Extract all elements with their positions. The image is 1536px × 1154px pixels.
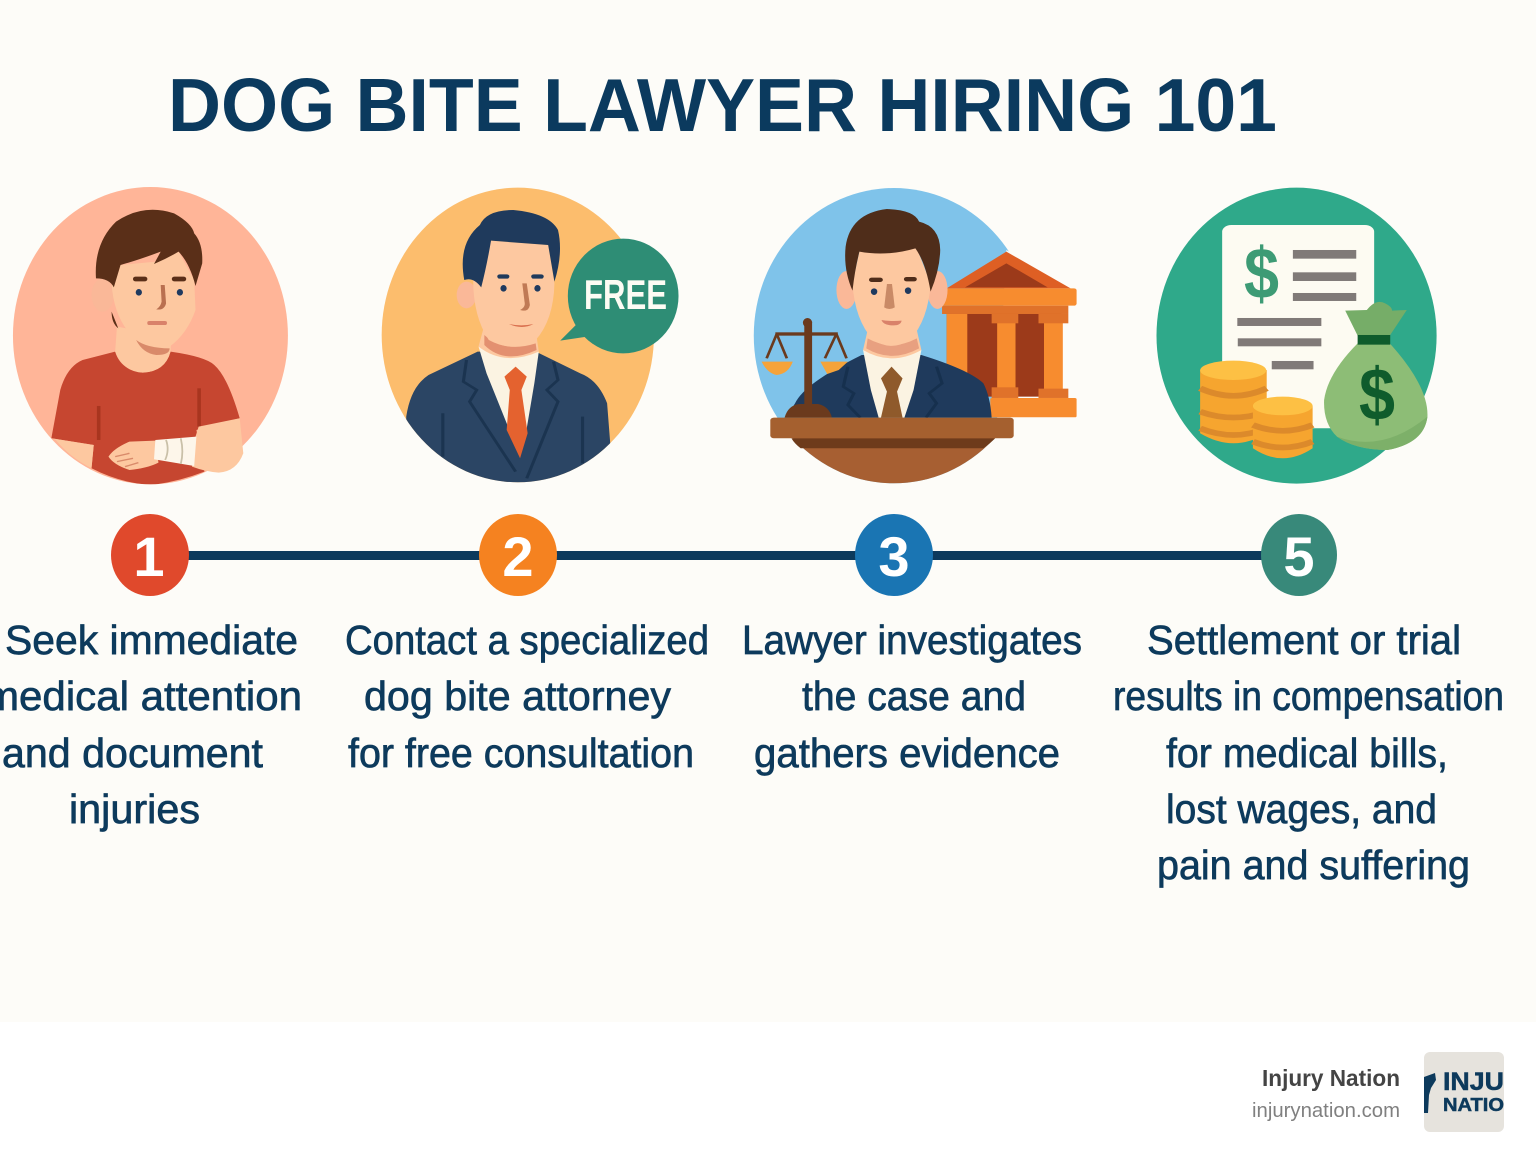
ear [457, 282, 476, 308]
settlement drawing [1156, 188, 1437, 484]
podium top [770, 418, 1014, 438]
illustration: attorney with free bubble [382, 188, 679, 487]
eyebrows [869, 277, 917, 282]
attorney drawing [382, 188, 679, 487]
red shirt [51, 352, 240, 485]
mouth [509, 324, 533, 327]
capitals and bases [992, 314, 1068, 398]
badge number: 5 [1283, 525, 1315, 588]
mouth [881, 320, 902, 325]
title: DOG BITE LAWYER HIRING 101 [168, 63, 1277, 147]
illustration: settlement money [1156, 188, 1437, 484]
eyes [871, 287, 911, 295]
neck [479, 330, 539, 358]
neck [863, 330, 921, 358]
logo wordmark: NATIO [1443, 1095, 1504, 1115]
nose [520, 283, 530, 311]
badge circle [479, 514, 557, 596]
neck shadow [136, 340, 170, 355]
scale strings [767, 334, 847, 358]
finial [803, 318, 812, 327]
badge number: 2 [502, 525, 534, 588]
bandage [154, 437, 196, 466]
hair [845, 209, 940, 292]
badge 2 [479, 514, 557, 596]
scale pans [762, 362, 848, 375]
logo wordmark: INJU [1443, 1068, 1504, 1096]
step 5 text: Settlement or trial [1147, 617, 1461, 663]
interior [947, 313, 1061, 397]
step 3 text: gathers evidence [754, 730, 1060, 776]
bag neck [1345, 302, 1407, 336]
face [473, 241, 554, 347]
badge 1 [111, 514, 189, 596]
badge 3 [855, 514, 933, 596]
lower brown fill [793, 438, 994, 484]
stack top [1253, 397, 1313, 415]
step 1 text: injuries [69, 786, 200, 832]
columns [947, 314, 1063, 397]
hair [463, 210, 560, 287]
roof [947, 252, 1071, 288]
logo wordmark [1444, 1072, 1504, 1112]
step 5 text [1113, 617, 1504, 888]
finger lines [115, 453, 138, 467]
eyes [500, 285, 541, 292]
bag shade [1337, 417, 1427, 450]
lapels [843, 367, 942, 418]
document dollar: $ [1244, 234, 1279, 314]
footer logo [1424, 1052, 1504, 1132]
illustration: injured person [13, 187, 288, 485]
shirt [863, 350, 921, 418]
bubble body [568, 239, 679, 353]
peach circle [13, 187, 288, 484]
eyes [136, 289, 183, 296]
eyebrows [497, 274, 544, 279]
small coin stack [1253, 397, 1313, 458]
step 5 text: results in compensation [1113, 673, 1504, 719]
nose [884, 284, 895, 309]
illustration: lawyer at podium with courthouse [754, 188, 1077, 484]
step 1 text [0, 617, 302, 832]
badge circle [111, 514, 189, 596]
timeline line [185, 551, 1265, 560]
shirt [479, 347, 539, 457]
bag tie [1358, 335, 1390, 345]
neck shadow [484, 335, 537, 356]
stack bands [1200, 388, 1267, 435]
stack body [1253, 406, 1313, 458]
left arm [51, 438, 94, 468]
money bag [1324, 302, 1427, 450]
scales of justice [762, 318, 848, 418]
mouth [147, 321, 167, 325]
hair [96, 210, 202, 328]
step 2 text: dog bite attorney [364, 673, 671, 719]
steps [990, 398, 1077, 417]
bag body [1324, 343, 1427, 450]
step 5 text: lost wages, and [1166, 786, 1437, 832]
large coin stack [1200, 361, 1267, 443]
badge circle [855, 514, 933, 596]
frieze [942, 306, 1068, 314]
step 3 text: Lawyer investigates [742, 617, 1082, 663]
green circle [1156, 188, 1437, 484]
scale base [785, 404, 832, 418]
free label: FREE [584, 271, 667, 318]
step 2 text: Contact a specialized [345, 617, 709, 663]
eyebrows [133, 277, 186, 281]
blue circle [754, 188, 1034, 483]
document [1222, 225, 1374, 428]
navy suit [406, 352, 610, 487]
brand url: injurynation.com [1252, 1100, 1400, 1122]
step 1 text: Seek immediate [5, 617, 298, 663]
pediment [965, 263, 1048, 287]
lapels [443, 360, 583, 478]
entablature [942, 288, 1077, 306]
face [112, 252, 196, 348]
footer brand text [1252, 1065, 1400, 1122]
step 2 text [345, 617, 709, 776]
neck shadow [866, 338, 919, 356]
brand name: Injury Nation [1262, 1065, 1400, 1091]
badge number: 1 [133, 525, 165, 588]
forearm [192, 418, 243, 473]
beam [775, 332, 838, 336]
nose [156, 285, 166, 310]
neck [115, 327, 171, 373]
tie [504, 367, 528, 458]
step 5 text: for medical bills, [1166, 730, 1448, 776]
stack bands [1253, 425, 1313, 447]
badge number: 3 [878, 525, 910, 588]
post [804, 322, 812, 405]
logo figure [1424, 1073, 1436, 1113]
ears [836, 271, 948, 309]
badge 5 [1261, 514, 1337, 596]
step 3 text: the case and [802, 673, 1026, 719]
background cover [997, 250, 1089, 418]
step 5 text: pain and suffering [1157, 842, 1470, 888]
speech bubble [560, 325, 587, 341]
orange circle [382, 188, 654, 482]
hand [108, 441, 158, 470]
step 1 text: and document [2, 730, 264, 776]
bandage folds [165, 438, 182, 464]
suit [786, 355, 992, 418]
sleeve folds [97, 388, 201, 440]
stack top [1200, 361, 1266, 380]
document lines [1237, 250, 1356, 369]
logo tile [1424, 1052, 1504, 1132]
step 2 text: for free consultation [348, 730, 694, 776]
ear [92, 278, 114, 312]
podium shadow [791, 438, 995, 448]
courthouse [942, 250, 1089, 418]
face [853, 248, 931, 346]
step 3 text [742, 617, 1082, 776]
badge circle [1261, 514, 1337, 596]
tie [881, 367, 903, 418]
bag dollar: $ [1359, 353, 1395, 436]
stack body [1200, 370, 1267, 443]
